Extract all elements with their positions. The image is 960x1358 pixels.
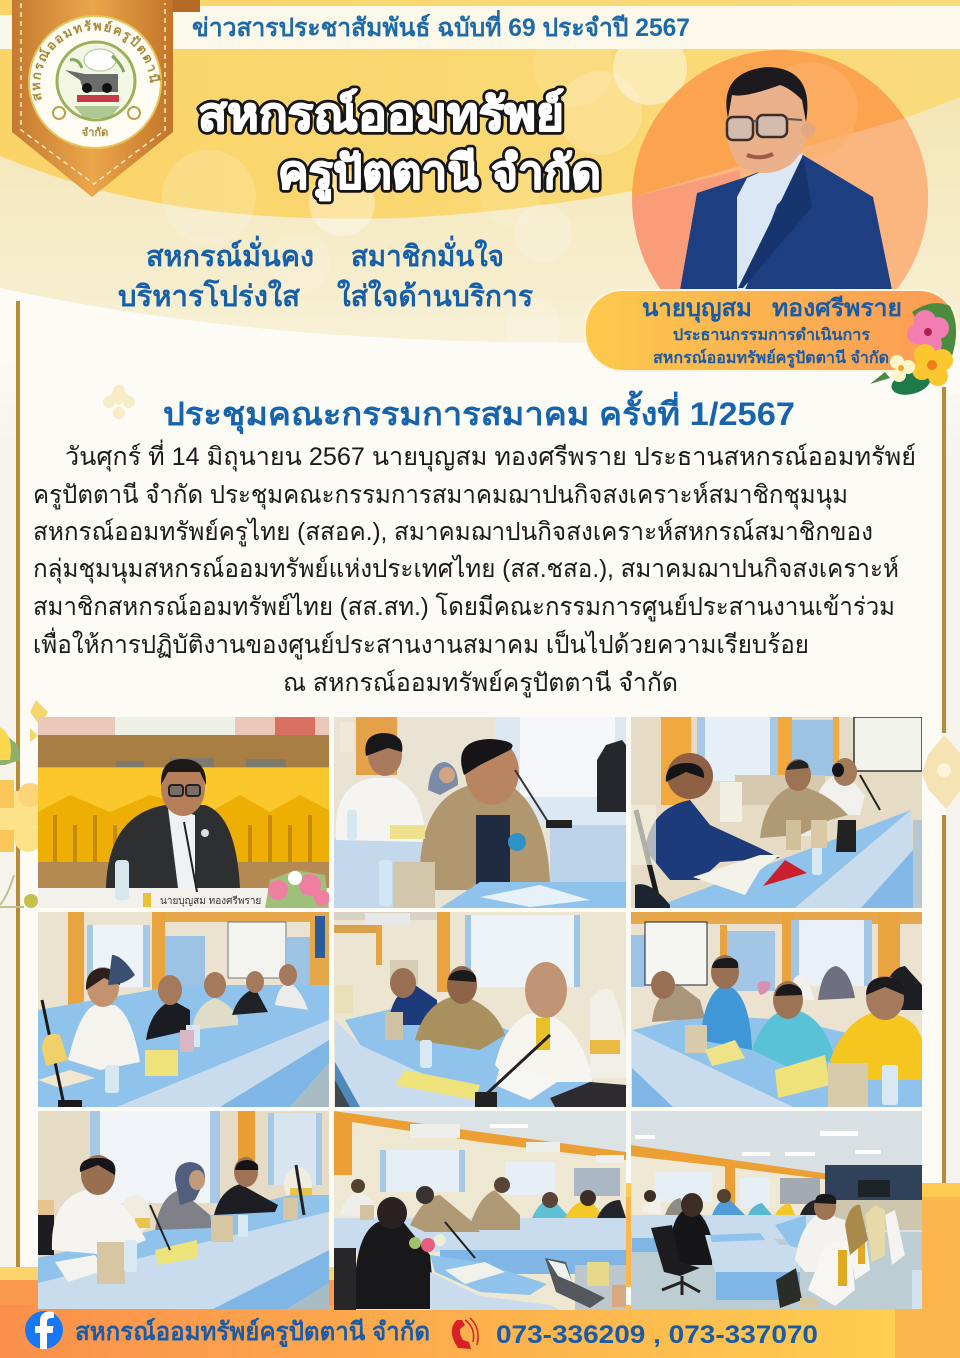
logo ribbon with emblem: จำกัด bbox=[82, 126, 108, 139]
ornament bbox=[103, 385, 135, 419]
photo 3: table view bbox=[631, 717, 922, 909]
side margins tint bbox=[0, 340, 960, 1267]
photo 9: perspective of the room bbox=[631, 1111, 922, 1309]
photo 1: chairman at desk bbox=[38, 717, 330, 908]
article body: สมาชิกสหกรณ์ออมทรัพย์ไทย (สส.สท.) โดยมีคณะกรรมการศูนย์ประสานงานเข้าร่วม bbox=[33, 592, 895, 622]
icon: tropical flowers bbox=[870, 303, 956, 399]
icon: facebook bbox=[25, 1311, 63, 1349]
top title band: ข่าวสารประชาสัมพันธ์ ฉบับที่ 69 ประจำปี 2567 bbox=[192, 10, 690, 42]
name plate: ทองศรีพราย bbox=[772, 295, 902, 322]
name plate: ประธานกรรมการดำเนินการ bbox=[673, 326, 870, 344]
header background bbox=[0, 0, 960, 400]
name plate: สหกรณ์ออมทรัพย์ครูปัตตานี จำกัด bbox=[653, 348, 889, 369]
footer contact bbox=[25, 1311, 818, 1349]
article body: เพื่อให้การปฏิบัติงานของศูนย์ประสานงานสมาคม เป็นไปด้วยความเรียบร้อย bbox=[33, 627, 809, 660]
article body: สหกรณ์ออมทรัพย์ครูไทย (สสอค.), สมาคมฌาปนกิจสงเคราะห์สหกรณ์สมาชิกของ bbox=[33, 517, 873, 547]
photo 2: participant laughing bbox=[334, 717, 626, 908]
motto: ใส่ใจด้านบริการ bbox=[337, 279, 533, 313]
logo ribbon with emblem bbox=[12, 0, 200, 197]
logo ribbon with emblem: สหกรณ์ออมทรัพย์ครูปัตตานี bbox=[32, 20, 162, 101]
heading: organisation name: ครูปัตตานี จำกัด bbox=[278, 146, 601, 201]
article body bbox=[33, 439, 916, 698]
article body: ครูปัตตานี จำกัด ประชุมคณะกรรมการสมาคมฌาปนกิจสงเคราะห์สมาชิกชุมนุม bbox=[33, 481, 848, 510]
motto: สมาชิกมั่นใจ bbox=[351, 235, 504, 273]
heading: organisation name: ครูปัตตานี จำกัด bbox=[278, 146, 601, 201]
name plate bbox=[585, 290, 957, 371]
heading: organisation name: สหกรณ์ออมทรัพย์ bbox=[198, 88, 564, 140]
photo 7: three participants bbox=[38, 1111, 329, 1309]
motto bbox=[118, 235, 533, 313]
footer contact: สหกรณ์ออมทรัพย์ครูปัตตานี จำกัด bbox=[75, 1317, 430, 1348]
article body: กลุ่มชุมนุมสหกรณ์ออมทรัพย์แห่งประเทศไทย (สส.ชสอ.), สมาคมฌาปนกิจสงเคราะห์ bbox=[33, 554, 899, 584]
frame lines bbox=[16, 301, 946, 1267]
side decorations: flower and ornament bbox=[0, 700, 960, 908]
heading: organisation name bbox=[198, 88, 601, 201]
top title band bbox=[0, 6, 960, 49]
photo 1: chairman at desk: นายบุญสม ทองศรีพราย bbox=[160, 895, 261, 907]
motto: สหกรณ์มั่นคง bbox=[146, 235, 314, 273]
article body: วันศุกร์ ที่ 14 มิถุนายน 2567 นายบุญสม ทองศรีพราย ประธานสหกรณ์ออมทรัพย์ bbox=[65, 439, 916, 472]
name plate: นายบุญสม bbox=[642, 295, 752, 324]
portrait of chairman bbox=[632, 50, 928, 346]
motto: บริหารโปร่งใส bbox=[118, 278, 300, 313]
footer contact: 073-336209 , 073-337070 bbox=[496, 1321, 818, 1349]
icon: telephone bbox=[452, 1318, 478, 1349]
heading: organisation name: สหกรณ์ออมทรัพย์ bbox=[198, 88, 564, 140]
article body: ณ สหกรณ์ออมทรัพย์ครูปัตตานี จำกัด bbox=[283, 669, 678, 698]
photo 8: wide room bbox=[334, 1111, 626, 1310]
article heading: ประชุมคณะกรรมการสมาคม ครั้งที่ 1/2567 bbox=[163, 390, 795, 435]
footer band bbox=[0, 1183, 960, 1358]
photo 4: meeting row left bbox=[38, 912, 329, 1107]
photo 6: meeting row right bbox=[631, 912, 922, 1107]
photo 5: meeting row centre bbox=[334, 912, 626, 1107]
